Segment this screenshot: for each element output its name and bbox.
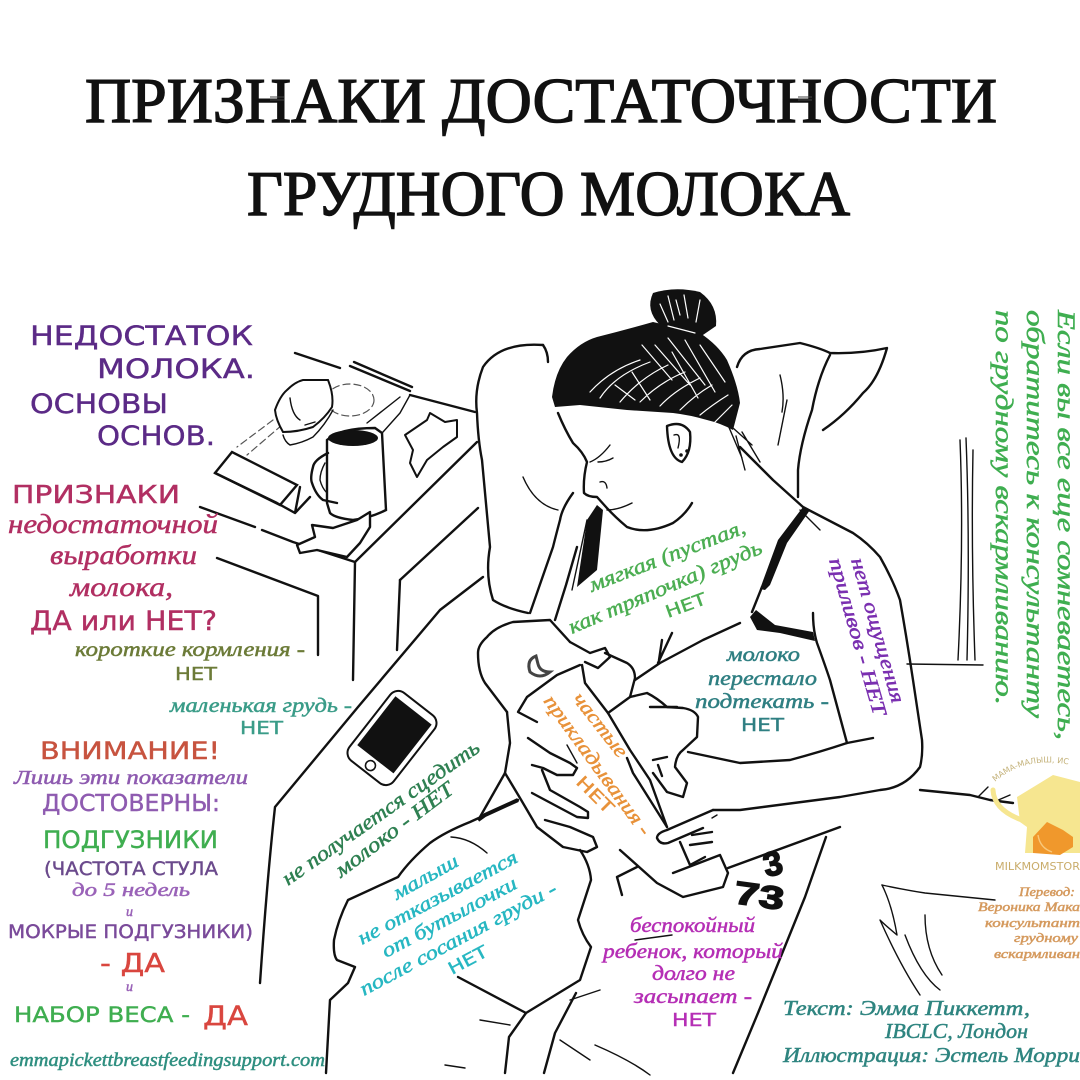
credits: Иллюстрация: Эстель Морри xyxy=(782,1043,1080,1067)
logo: yellow elephant: МАМА-МАЛЫШ, ИС xyxy=(992,756,1069,782)
logo: yellow elephant xyxy=(990,756,1080,855)
note: soft breast: как тряпочка) грудь xyxy=(565,535,765,639)
note: soft breast xyxy=(565,515,765,639)
side note: consult a specialist: Если вы все еще сомневаетесь, xyxy=(1052,309,1079,740)
note: cannot express milk: молоко - НЕТ xyxy=(329,776,459,883)
note: restless baby: беспокойный xyxy=(630,913,756,937)
translation credit: вскармливан xyxy=(994,946,1080,961)
side note: consult a specialist xyxy=(990,309,1079,740)
attention: reliable indicators xyxy=(8,737,253,1032)
note: restless baby: засыпает - xyxy=(633,984,752,1008)
heading: signs of low supply: ДА или НЕТ? xyxy=(30,606,217,637)
credits: IBCLC, Лондон xyxy=(884,1019,1028,1043)
note: small breast: НЕТ xyxy=(240,718,284,739)
nightstand xyxy=(200,353,478,680)
heading: lack of milk xyxy=(30,321,255,452)
note: restless baby: ребенок, который xyxy=(601,939,784,963)
heading: lack of milk: НЕДОСТАТОК xyxy=(30,321,253,352)
note: baby takes bottle after feed xyxy=(354,846,561,1000)
note: baby takes bottle after feed: от бутылочки xyxy=(378,873,521,962)
bun and hair xyxy=(552,289,760,470)
note: soft breast: НЕТ xyxy=(663,589,710,623)
note: no let-down sensation: нет ощущения xyxy=(846,555,909,706)
note: restless baby xyxy=(601,913,784,1031)
note: frequent feeds: частые xyxy=(568,689,632,762)
note: frequent feeds: НЕТ xyxy=(571,772,618,819)
heading: signs of low supply xyxy=(8,480,219,637)
side note: consult a specialist: по грудному вскармливанию. xyxy=(990,310,1017,705)
note: short feeds: короткие кормления - xyxy=(75,637,305,661)
translation credit: Вероника Мака xyxy=(978,899,1080,914)
blanket leaf fold xyxy=(880,885,995,995)
heading: lack of milk: ОСНОВЫ xyxy=(30,389,168,420)
attention: reliable indicators: ДОСТОВЕРНЫ: xyxy=(42,791,220,817)
attention: reliable indicators: до 5 недель xyxy=(72,880,190,901)
heading: signs of low supply: выработки xyxy=(50,540,197,570)
side note: consult a specialist: обратитесь к консультанту xyxy=(1021,310,1048,719)
title xyxy=(85,65,997,229)
note: baby takes bottle after feed: не отказывается xyxy=(354,846,522,949)
numbers on trousers xyxy=(732,844,787,917)
phone xyxy=(343,687,441,789)
note: milk stopped leaking xyxy=(695,642,829,736)
note: small breast xyxy=(169,695,352,739)
note: restless baby: НЕТ xyxy=(672,1010,717,1031)
heading: lack of milk: ОСНОВ. xyxy=(97,421,215,452)
heading: signs of low supply: недостаточной xyxy=(8,509,219,539)
illustration: mother breastfeeding on a bed xyxy=(200,289,1013,1075)
pillows xyxy=(476,343,887,613)
note: baby takes bottle after feed: после сосания груди - xyxy=(356,878,561,1000)
translation credit: MILKMOMSTOR xyxy=(995,860,1080,873)
attention: reliable indicators: НАБОР ВЕСА - xyxy=(14,1003,190,1027)
attention: reliable indicators: (ЧАСТОТА СТУЛА xyxy=(44,858,218,880)
attention: reliable indicators: Лишь эти показатели xyxy=(13,767,248,789)
attention: reliable indicators: и xyxy=(126,980,133,995)
title: ГРУДНОГО МОЛОКА xyxy=(247,158,850,229)
note: frequent feeds: прикладывания - xyxy=(539,691,656,840)
note: baby takes bottle after feed: малыш xyxy=(388,850,462,905)
note: baby takes bottle after feed: НЕТ xyxy=(445,942,492,979)
note: short feeds: НЕТ xyxy=(175,664,218,685)
note: short feeds xyxy=(75,637,305,685)
note: milk stopped leaking: перестало xyxy=(708,666,817,690)
attention: reliable indicators: ПОДГУЗНИКИ xyxy=(43,826,218,854)
bed lines xyxy=(260,438,1013,983)
note: milk stopped leaking: молоко xyxy=(726,642,800,666)
heading: signs of low supply: ПРИЗНАКИ xyxy=(12,480,180,509)
credits: Текст: Эмма Пиккетт, xyxy=(783,996,1030,1020)
note: small breast: маленькая грудь - xyxy=(169,695,352,717)
website: emmapickettbreastfeedingsupport.com xyxy=(10,1050,325,1071)
translation credit: консультант xyxy=(985,915,1080,930)
attention: reliable indicators: ВНИМАНИЕ! xyxy=(40,737,220,765)
mother's hands xyxy=(505,712,717,865)
attention: reliable indicators: - ДА xyxy=(100,949,165,979)
attention: reliable indicators: и xyxy=(126,905,133,920)
numbers on trousers: 3 xyxy=(760,844,786,885)
face and ear xyxy=(558,413,692,530)
numbers on trousers: 73 xyxy=(732,874,787,917)
note: no let-down sensation: приливов - НЕТ xyxy=(824,555,891,720)
cup, book and crumbs on the nightstand xyxy=(215,380,457,557)
translation credit xyxy=(978,860,1080,961)
credits xyxy=(782,996,1080,1067)
attention: reliable indicators: МОКРЫЕ ПОДГУЗНИКИ) xyxy=(8,921,253,943)
translation credit: грудному xyxy=(1014,930,1078,945)
mother's torso, arm and bra xyxy=(530,447,922,810)
legs and blanket folds xyxy=(326,773,840,1075)
title: ПРИЗНАКИ ДОСТАТОЧНОСТИ xyxy=(85,65,997,136)
note: no let-down sensation xyxy=(824,555,909,720)
attention: reliable indicators: ДА xyxy=(203,1001,249,1032)
note: milk stopped leaking: НЕТ xyxy=(741,715,785,736)
baby xyxy=(478,620,728,897)
translation credit: Перевод: xyxy=(1018,884,1075,899)
heading: signs of low supply: молока, xyxy=(69,572,173,602)
note: restless baby: долго не xyxy=(652,961,735,985)
note: soft breast: мягкая (пустая, xyxy=(584,515,749,597)
note: cannot express milk: не получается сцедить xyxy=(277,735,484,890)
note: milk stopped leaking: подтекать - xyxy=(695,689,829,713)
heading: lack of milk: МОЛОКА. xyxy=(97,354,255,385)
